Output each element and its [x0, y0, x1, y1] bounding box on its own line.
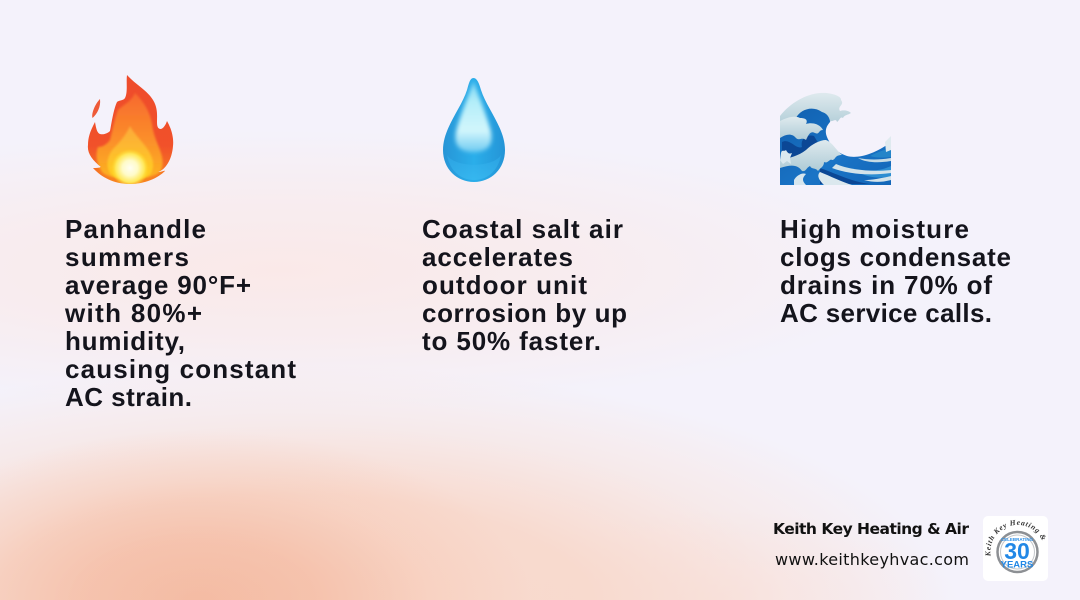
text: high moisture: drains in 70% of: [780, 270, 992, 300]
text: coastal salt air: accelerates: [422, 242, 573, 272]
text: Panhandle summers: AC strain.: [65, 382, 192, 412]
icon: great wave: [780, 93, 891, 185]
text: high moisture: [780, 216, 1011, 328]
text: coastal salt air: corrosion by up: [422, 298, 627, 328]
text: Panhandle summers: humidity,: [65, 326, 185, 356]
text: coastal salt air: [422, 216, 627, 356]
text: high moisture: clogs condensate: [780, 242, 1011, 272]
text: coastal salt air: to 50% faster.: [422, 326, 601, 356]
text: Panhandle summers: causing constant: [65, 354, 296, 384]
logo: 30 years badge: YEARS: [1001, 560, 1033, 570]
logo: 30 years badge: [983, 516, 1048, 581]
text: Panhandle summers: with 80%+: [64, 298, 202, 328]
icon: fire: [88, 75, 174, 184]
company name: Keith Key Heating & Air: [773, 520, 969, 538]
text: Panhandle summers: [64, 216, 296, 412]
logo: 30 years badge: CELEBRATING: [1001, 537, 1034, 542]
text: high moisture: AC service calls.: [780, 298, 992, 328]
website: www.keithkeyhvac.com: [775, 550, 969, 569]
logo: 30 years badge: 30: [1004, 538, 1030, 564]
text: Panhandle summers: summers: [65, 242, 189, 272]
text: Panhandle summers: average 90°F+: [65, 270, 251, 300]
text: coastal salt air: outdoor unit: [422, 270, 587, 300]
icon: water drop: [443, 78, 505, 182]
